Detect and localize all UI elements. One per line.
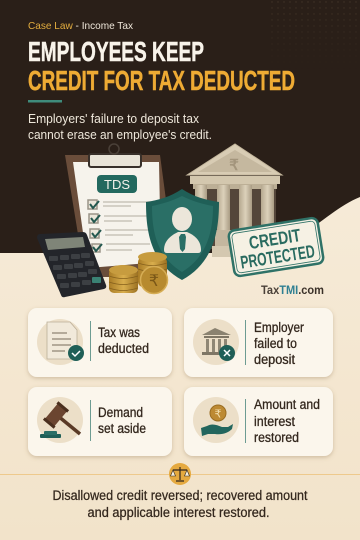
panel: tax was deducted: deducted [98,341,149,356]
dark header panel [0,0,360,253]
icon: coin over hand [193,397,239,443]
stamp: credit protected: PROTECTED [239,241,316,273]
illustration: calculator [37,232,106,297]
footer text: Disallowed credit reversed; recovered amount [52,488,308,503]
subtitle [28,111,212,142]
panel: amount and interest restored: Amount and [254,397,320,412]
footer text: and applicable interest restored. [88,505,270,520]
footer divider [0,474,360,475]
subtitle: cannot erase an employee's credit. [28,127,212,142]
category label: Case Law - Income Tax [28,20,134,32]
panel: demand set aside: set aside [98,421,146,436]
stamp: credit protected: CREDIT [248,225,302,253]
panel: employer failed to deposit: failed to [254,336,297,351]
panel: employer failed to deposit: Employer [254,320,304,335]
panel: tax was deducted [28,308,172,377]
clip [89,154,141,167]
illustration: clipboard: TDS [104,177,130,192]
accent rule [28,100,62,102]
panel: employer failed to deposit: deposit [254,352,295,367]
icon: document with check [37,319,84,365]
stamp: credit protected [228,217,324,277]
icon: scales [169,463,191,485]
title [28,36,295,96]
title: EMPLOYEES KEEP [28,36,204,67]
panel: tax was deducted: Tax was [98,325,140,340]
illustration: coins: ₹ [149,273,159,290]
panel: amount and interest restored: restored [254,430,299,445]
panel: employer failed to deposit [184,308,333,377]
panel: amount and interest restored: interest [254,414,295,429]
logo: TaxTMI.com: TaxTMI.com [261,283,324,297]
illustration: coins [109,252,168,294]
person [172,207,192,231]
TDS badge [97,175,137,193]
illustration: shield [146,189,219,280]
illustration: clipboard [65,144,166,277]
panel: amount and interest restored [184,387,333,456]
footer text [52,488,308,520]
checklist [88,200,154,252]
teal key [92,277,101,283]
icon: gavel [37,397,83,443]
icon: coin over hand: ₹ [214,408,222,420]
illustration: bank building [187,144,282,257]
icon: bank with cross [193,319,239,365]
panel: demand set aside [28,387,172,456]
subtitle: Employers' failure to deposit tax [28,111,199,126]
rupee on pediment: ₹ [229,157,239,174]
panel: demand set aside: Demand [98,405,143,420]
header text block [28,20,295,142]
